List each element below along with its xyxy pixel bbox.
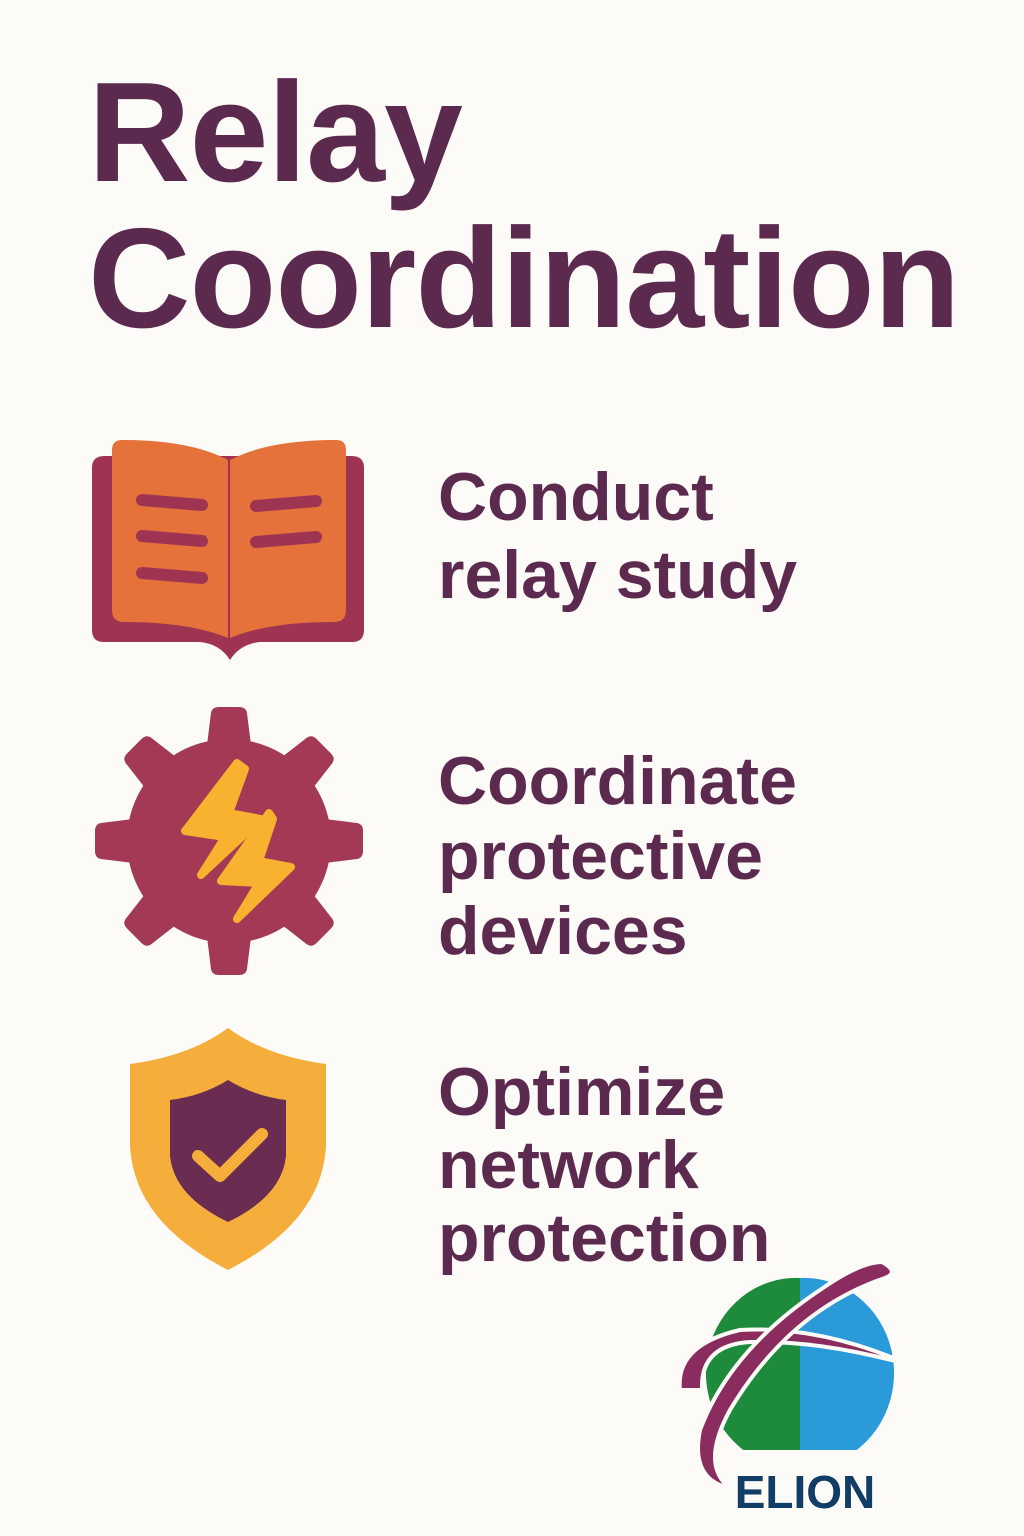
text: step 3: [438, 1054, 770, 1276]
icon: shield with check: [130, 1028, 326, 1270]
text: step 1: [438, 459, 797, 613]
text: step 2: [438, 743, 797, 969]
text: step 2: Coordinate: [438, 743, 797, 819]
text: step 2: devices: [438, 893, 688, 969]
text: step 1: Conduct: [438, 459, 714, 535]
logo: ELION: ELION: [735, 1466, 875, 1518]
title: Coordination: [88, 199, 959, 358]
text: step 3: protection: [438, 1200, 770, 1276]
text: step 1: relay study: [438, 537, 797, 613]
text: step 3: Optimize: [438, 1054, 725, 1130]
text: step 2: protective: [438, 818, 763, 894]
title: Relay: [88, 53, 462, 212]
icon: gear with lightning: [95, 707, 363, 975]
title: [88, 53, 959, 358]
text: step 3: network: [438, 1127, 699, 1203]
logo: ELION: [682, 1264, 894, 1518]
icon: open book: [92, 440, 364, 660]
